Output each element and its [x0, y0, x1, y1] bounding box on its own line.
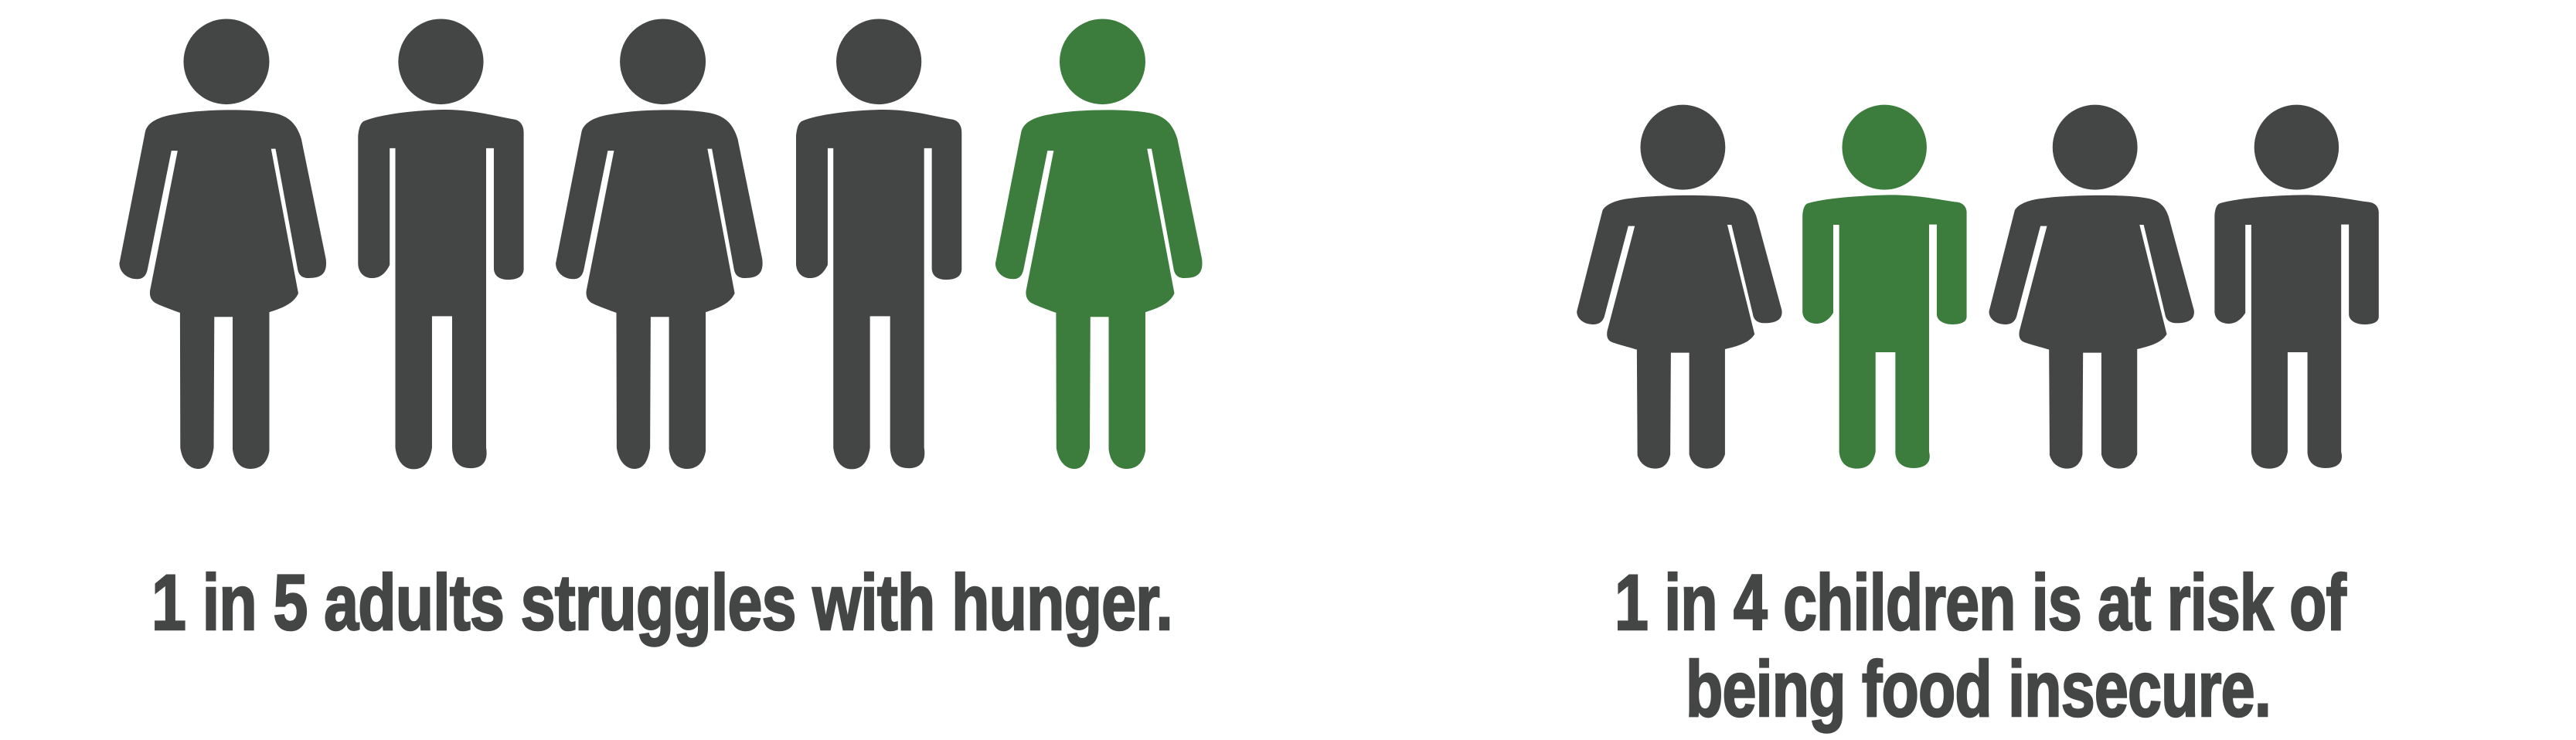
- icon: child girl 2: [1989, 105, 2194, 469]
- icon: adult man 2: [796, 19, 961, 469]
- icon: child girl 1: [1577, 105, 1782, 469]
- caption: adults statistic: 1 in 5 adults struggles with hunger.: [151, 558, 1172, 647]
- caption: children statistic: 1 in 4 children is at risk of: [1615, 558, 2347, 647]
- panel: adults pictogram row: [119, 19, 1203, 469]
- icon: adult woman highlighted green: [995, 19, 1203, 469]
- icon: adult woman 1: [119, 19, 326, 469]
- panel: children pictogram row: [1577, 105, 2379, 469]
- icon: child boy highlighted green: [1802, 105, 1967, 469]
- caption: children statistic: [1615, 558, 2347, 733]
- caption: children statistic: being food insecure.: [1686, 645, 2271, 733]
- icon: child boy 2: [2214, 105, 2379, 469]
- icon: adult woman 2: [556, 19, 763, 469]
- icon: adult man 1: [358, 19, 524, 469]
